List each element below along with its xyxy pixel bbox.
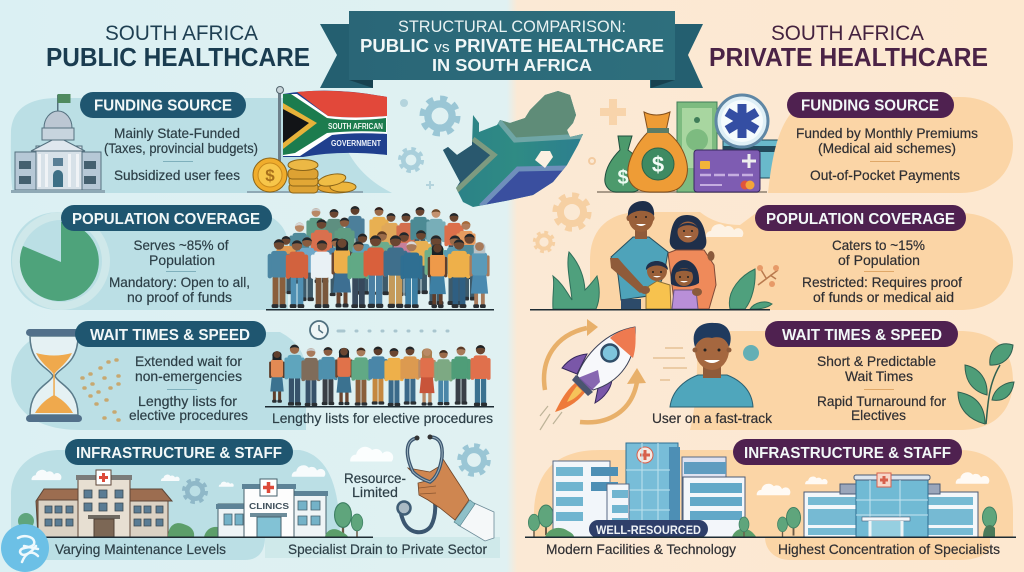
title line 1: STRUCTURAL COMPARISON: [398,17,626,36]
icon: South African flag with coins: SOUTH AFRICAN [328,122,383,131]
heading: funding source [80,92,246,118]
heading: south africa public healthcare [46,22,310,72]
heading: infrastructure and staff [733,439,962,465]
text: mandatory: Mandatory: Open to all, [109,274,250,290]
boy [640,261,671,309]
panel: public wait times [11,321,306,430]
text: no proof of funds: no proof of funds [127,289,232,305]
panel: private infrastructure [525,439,1016,560]
illustration: family [530,201,779,310]
icon: modern hospital complex [528,443,756,538]
panel: public population coverage [11,205,288,310]
icon: public clinic: CLINICS [249,501,289,511]
text: lengthy lists: Lengthy lists for [138,393,237,409]
icon: South African flag with coins: GOVERNMENT [331,139,381,148]
panel: public infrastructure [10,439,500,560]
text: resource-limited [344,470,406,500]
caption: varying maintenance levels: Varying Maintenance Levels [55,541,226,557]
icon: clouds [32,465,325,487]
heading: south africa private healthcare: SOUTH AFRICA [771,22,924,45]
heading: infrastructure and staff: INFRASTRUCTURE & STAFF [76,445,282,462]
icon: clouds [705,472,989,495]
icon: money bags, bill, emblem and cards: $ [617,167,629,189]
panel: private wait times [690,321,1014,430]
caption: user on a fast-track: User on a fast-track [652,410,773,426]
icon: bottom-left logo badge [1,524,49,572]
illustration: rocket fast track [540,319,646,430]
text: user fees: Subsidized user fees [114,167,240,183]
icon: South African flag with coins [247,86,387,193]
panel: private population coverage [590,205,1013,310]
text: serves 85 percent: Serves ~85% of [134,237,229,253]
heading: funding source: FUNDING SOURCE [94,98,232,114]
text: population: Population [149,252,215,268]
heading: south africa private healthcare [709,22,988,72]
heading: south africa public healthcare: SOUTH AFRICA [105,22,258,45]
chart: 85 percent pie [16,216,106,306]
text: electives: Electives [851,407,906,423]
icon: clock with dots [310,321,448,339]
illustration: crowd of people [266,206,494,310]
heading: wait times and speed [765,321,958,347]
icon: cloud [706,224,743,237]
heading: population coverage [61,205,272,231]
icon: public side gears [400,99,457,189]
heading: infrastructure and staff [65,439,293,465]
caption: modern facilities: Modern Facilities & Technology [546,541,736,557]
text: out of pocket: Out-of-Pocket Payments [810,167,960,183]
text: rapid turnaround: Rapid Turnaround for [817,393,946,409]
heading: population coverage: POPULATION COVERAGE [766,211,955,228]
caption: concentration of specialists: Highest Concentration of Specialists [778,541,1000,557]
text: elective procedures: elective procedures [129,407,248,423]
heading: population coverage [755,205,966,231]
text: monthly premiums: Funded by Monthly Premiums [796,125,978,141]
icon: gear [184,480,206,502]
woman [668,215,716,309]
illustration: queue of people [265,345,494,426]
illustration: smiling man on fast track [652,323,773,426]
heading: infrastructure and staff: INFRASTRUCTURE & STAFF [744,445,951,462]
text: short and predictable: Short & Predictable [817,353,936,369]
icon: hourglass with sand particles [26,329,119,422]
icon: public clinic [204,479,363,537]
icon: money bags, bill, emblem and cards [597,95,780,193]
label: well-resourced: WELL-RESOURCED [596,525,701,537]
caption: lengthy lists: Lengthy lists for elective procedures [272,410,493,426]
heading: funding source: FUNDING SOURCE [801,98,939,114]
panel: public funding source [11,92,392,193]
text: of population: of Population [838,252,920,268]
icon: plant [958,344,1014,424]
text: caters to 15 percent: Caters to ~15% [832,237,925,253]
icon: South African flag with coins: $ [265,166,275,185]
text: non-emergencies: non-emergencies [135,368,242,384]
heading: wait times and speed: WAIT TIMES & SPEED [90,327,250,344]
text: taxes and budgets: (Taxes, provincial budgets) [104,140,258,156]
heading: population coverage: POPULATION COVERAGE [72,211,260,228]
label: well-resourced [589,520,708,538]
girl [671,260,702,309]
text: wait times: Wait Times [845,368,913,384]
icon: map of South Africa [443,91,583,207]
title line 3: IN SOUTH AFRICA [432,55,592,75]
text: resource-limited: Limited [352,484,398,500]
caption: specialist drain: Specialist Drain to Private Sector [288,541,487,557]
heading: south africa private healthcare: PRIVATE HEALTHCARE [709,42,988,72]
icon: public hospital [18,470,194,537]
icon: stethoscope in hand [398,434,494,541]
icon: cloud and gear [350,446,488,474]
title line 2: PUBLIC vs PRIVATE HEALTHCARE [360,36,664,56]
text: resource-limited: Resource- [344,470,406,486]
text: proof of funds: of funds or medical aid [813,289,954,305]
heading: wait times and speed: WAIT TIMES & SPEED [782,327,942,344]
text: medical aid schemes: (Medical aid schemes) [818,140,956,156]
heading: funding source [787,92,954,118]
text: extended wait: Extended wait for [135,353,242,369]
text: state funded: Mainly State-Funded [114,125,240,141]
icon: capitol building [11,94,105,193]
icon: money bags, bill, emblem and cards: $ [652,152,664,177]
heading: wait times and speed [75,321,266,347]
icon: specialist hospital [778,473,997,537]
man [610,201,668,309]
heading: south africa public healthcare: PUBLIC HEALTHCARE [46,42,310,72]
text: restricted: Restricted: Requires proof [802,274,962,290]
panel: private funding source [768,92,1013,193]
icon: private side gears and plus [535,99,626,251]
banner: central title [320,11,703,88]
